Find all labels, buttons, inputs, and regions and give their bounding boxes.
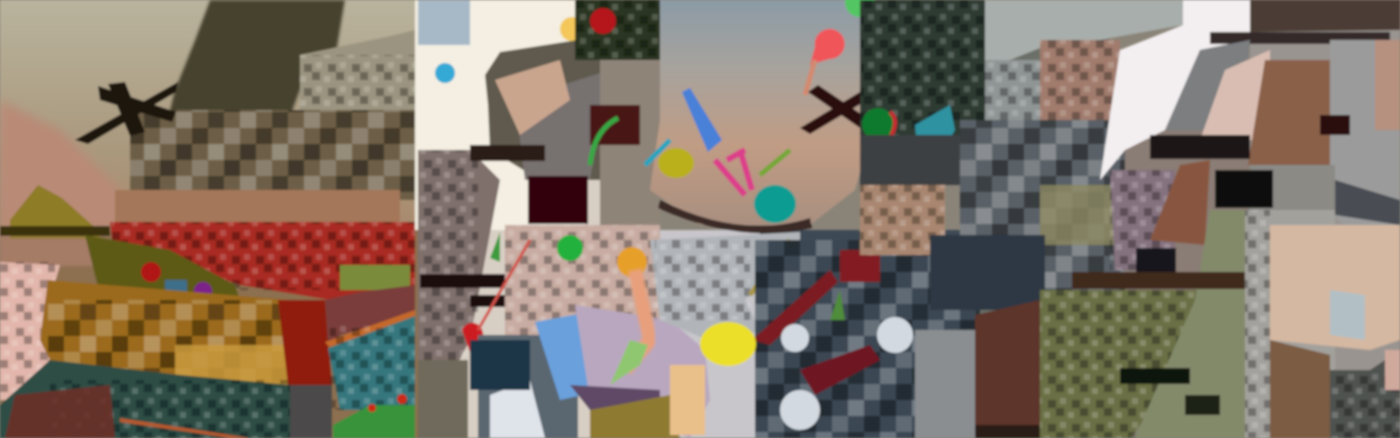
panel: middle collage section — [415, 0, 980, 438]
olive foliage — [85, 235, 240, 300]
pink haze — [0, 100, 130, 240]
navy crowd — [930, 235, 1045, 310]
pink branches — [1200, 50, 1270, 140]
green balloon — [557, 235, 583, 261]
green arc — [590, 118, 618, 165]
dark blue bottom — [470, 340, 530, 390]
crowd lower warm row — [115, 190, 400, 224]
golden ground — [590, 395, 680, 438]
amber crowd — [40, 280, 300, 385]
dark beams 2 — [420, 274, 530, 307]
dark foot — [1136, 248, 1176, 272]
bowl ridge dark — [658, 200, 812, 233]
brown planks — [1248, 60, 1345, 165]
silver water — [650, 232, 800, 345]
yellow balloon — [700, 322, 756, 366]
white snow — [490, 380, 545, 438]
white rough bark — [1245, 210, 1335, 438]
red and purple dots — [141, 262, 212, 300]
dark window 2 — [1215, 170, 1273, 208]
sepia building — [300, 30, 415, 120]
dark red pieces — [590, 105, 640, 145]
dark hut wood — [1250, 0, 1400, 32]
left strip below horizon — [0, 238, 100, 266]
branches on pink — [495, 60, 570, 135]
pink building — [1040, 40, 1120, 130]
green top balloon — [845, 0, 875, 17]
horizontal beam top — [1210, 32, 1390, 44]
grey bark column — [418, 150, 500, 438]
bottom left dark — [418, 360, 468, 438]
sepia sky — [0, 0, 420, 230]
panel: right-center tree — [860, 0, 1210, 438]
dark ridge lines — [0, 226, 110, 236]
sepia ground — [1270, 340, 1330, 438]
teal balloon — [754, 185, 796, 223]
lavender shore — [570, 385, 660, 410]
blue reflection — [1330, 290, 1365, 340]
green red balloon cluster — [862, 108, 895, 140]
red band — [110, 222, 415, 300]
lower branch fill — [478, 335, 578, 438]
dark scallop plane — [800, 80, 884, 134]
dark maroon spot — [1320, 115, 1350, 135]
shadowy crowd fill — [860, 135, 960, 185]
white sky — [415, 0, 585, 230]
grey under planks — [1250, 165, 1335, 210]
dark teal bottom — [0, 360, 290, 438]
pink left bank — [0, 262, 60, 400]
orange balloon — [617, 247, 647, 277]
dark grey streaks — [1335, 180, 1400, 225]
red diagonal — [752, 270, 838, 345]
coral string — [805, 60, 815, 95]
brown trunk — [1150, 160, 1210, 245]
dark trunk foliage — [575, 0, 685, 60]
grey pale sky middle — [650, 0, 885, 225]
dark window — [1150, 135, 1250, 159]
peach face strip — [1375, 40, 1400, 130]
grey stone — [290, 385, 332, 438]
red balloon left — [462, 323, 483, 352]
gold bank stroke — [750, 240, 790, 295]
olive mountain — [10, 185, 100, 240]
panel: left collage section — [0, 0, 420, 438]
white balloons — [780, 317, 913, 430]
pink ribbon — [715, 150, 752, 195]
yellow cream balloon — [560, 17, 584, 41]
yellowish patch — [1040, 185, 1115, 245]
dark navy crowd — [755, 240, 980, 438]
pale sky right top — [985, 0, 1183, 60]
dark beam — [470, 145, 545, 161]
sky blue clothing — [535, 310, 605, 400]
red figure — [278, 300, 332, 385]
blue ribbon — [682, 88, 722, 152]
panel: right collage section — [1072, 0, 1400, 438]
peach sky right — [1270, 225, 1400, 350]
wood hut — [485, 38, 600, 180]
amber highlight — [175, 345, 290, 385]
dark tree — [860, 0, 990, 135]
green highlight — [340, 265, 410, 290]
teal string — [645, 140, 670, 165]
teal tree — [328, 316, 415, 410]
dark red lower — [800, 345, 880, 395]
green leaf strip — [490, 232, 500, 262]
orange bottom line — [120, 418, 250, 438]
green feather — [760, 150, 790, 175]
plane silhouette — [75, 82, 178, 144]
red string — [478, 240, 530, 330]
hedge panel — [325, 285, 415, 345]
green bush — [333, 405, 415, 438]
red flowers — [368, 394, 407, 412]
lavender panel — [575, 305, 710, 438]
purple tree — [1110, 170, 1175, 270]
yellow-olive balloon — [658, 148, 694, 178]
red balloon — [590, 8, 616, 34]
dark foot lower — [1120, 368, 1190, 384]
white sky — [1100, 0, 1250, 180]
sepia tree — [160, 0, 345, 150]
pale green balloon — [610, 340, 648, 385]
dark gaps — [975, 425, 1040, 438]
brown doorway — [975, 300, 1040, 425]
green foliage — [1040, 290, 1210, 438]
red coral balloon — [810, 29, 845, 65]
grey crowd — [960, 120, 1125, 290]
maroon block — [528, 176, 588, 224]
sepia crowd — [130, 110, 420, 200]
pink branches — [505, 225, 660, 335]
green-grey trunk — [1135, 210, 1270, 438]
peach balloon strings — [625, 270, 650, 370]
orange diagonal — [325, 310, 415, 348]
blue balloon tops — [418, 0, 470, 83]
grey hut — [1165, 40, 1250, 130]
peach child figure — [860, 185, 945, 255]
teal figure — [915, 105, 955, 165]
grey wall — [915, 330, 975, 438]
grey building — [985, 60, 1040, 130]
hut diag — [515, 70, 610, 180]
red figure — [840, 250, 880, 282]
bright right face — [1330, 40, 1400, 290]
peach rectangle — [670, 365, 705, 435]
grey branch fill — [600, 60, 660, 230]
dark right tree — [1330, 350, 1400, 438]
pink right edge — [1385, 350, 1400, 390]
green leaf right — [830, 290, 845, 320]
brown horizontal beam — [1072, 272, 1334, 289]
green square leaf — [664, 28, 686, 54]
maroon patch — [5, 385, 115, 438]
